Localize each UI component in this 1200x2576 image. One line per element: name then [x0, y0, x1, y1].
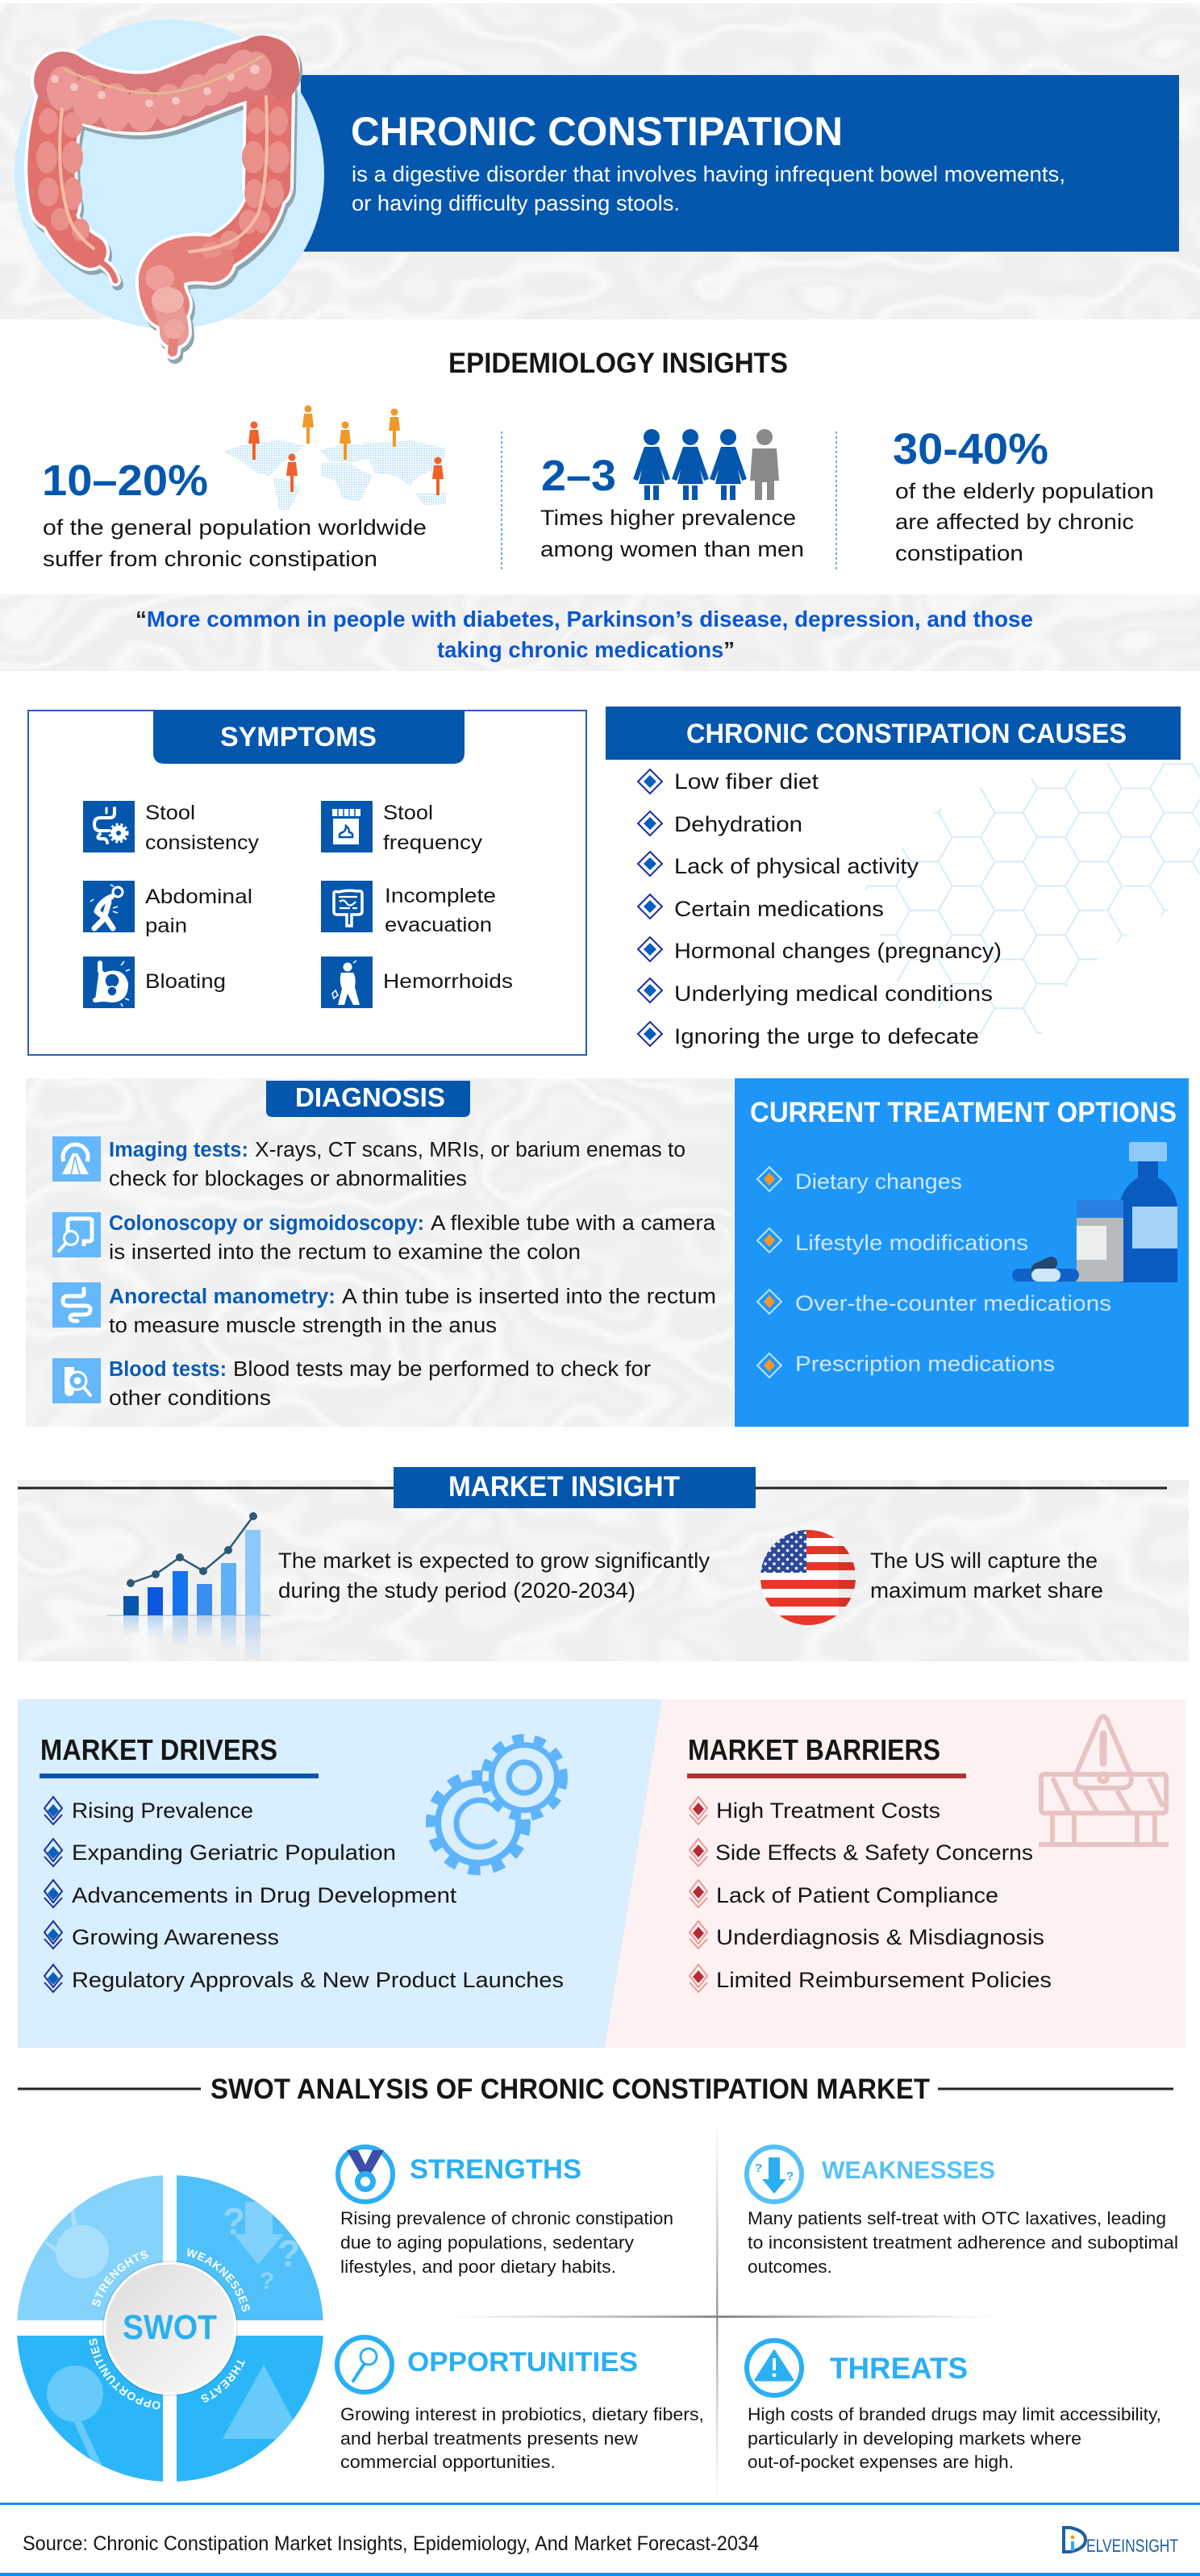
- market growth text: during the study period (2020-2034): [278, 1578, 635, 1603]
- diagnosis: anorectal manometry: Anorectal manometry:: [109, 1286, 335, 1308]
- panel: market drivers: [18, 1699, 662, 2048]
- symptom: abdominal pain: [83, 881, 252, 937]
- stat: 30-40%: constipation: [895, 541, 1023, 565]
- callout: quote strip: “More common in people with diabetes, Parkinson’s disease, depression, and those: [135, 606, 1033, 631]
- hexagon pattern: [865, 763, 1200, 1034]
- icon: warning barrier: [1039, 1716, 1169, 1844]
- diagnosis: colonoscopy: [52, 1212, 716, 1264]
- symptom: incomplete evacuation: evacuation: [385, 914, 492, 936]
- cause list: Certain medications: [674, 897, 884, 921]
- cause list: Low fiber diet: [674, 769, 819, 794]
- diagnosis: imaging tests: check for blockages or abnormalities: [109, 1168, 467, 1190]
- curved labels: STRENGHTS: [92, 2250, 148, 2307]
- cause list: Dehydration: [674, 812, 802, 836]
- cause list: Lack of physical activity: [674, 854, 919, 878]
- title: CHRONIC CONSTIPATION: [351, 109, 843, 154]
- barriers list: [690, 1797, 1052, 1992]
- cause list: [638, 769, 1002, 1048]
- header circle: [15, 19, 324, 329]
- diagnosis: anorectal manometry: [52, 1282, 716, 1337]
- footer: [0, 2503, 1200, 2576]
- threats block: THREATS: [830, 2352, 968, 2385]
- symptom: incomplete evacuation: [321, 881, 496, 936]
- icon: medal: [338, 2147, 393, 2202]
- causes heading: [606, 707, 1181, 760]
- symptom: bloating: [83, 957, 226, 1008]
- pale swot marks: [224, 2208, 298, 2289]
- diagnosis: blood tests: Blood tests may be performed to check for: [233, 1358, 652, 1381]
- symptom: abdominal pain: Abdominal: [145, 886, 252, 908]
- barriers list: Lack of Patient Compliance: [716, 1883, 998, 1907]
- icon: down arrow with question marks: ?: [755, 2161, 762, 2175]
- market growth text: [278, 1549, 710, 1603]
- symptom: stool consistency: consistency: [145, 832, 260, 854]
- diagnosis: blood tests: [52, 1358, 652, 1410]
- threats block: [747, 2340, 1161, 2472]
- icon: magnifier: [337, 2337, 392, 2392]
- title band: [301, 75, 1179, 252]
- stat: 10-20%: [42, 456, 427, 571]
- symptom: hemorrhoids: [321, 957, 513, 1008]
- definition text: is a digestive disorder that involves having infrequent bowel movements,: [352, 162, 1065, 186]
- stat: 2-3: [540, 429, 804, 561]
- chart: SWOT wheel: SWOT: [123, 2308, 217, 2347]
- pale swot marks: ?: [277, 2232, 300, 2274]
- symptom: incomplete evacuation: Incomplete: [385, 885, 496, 907]
- opportunities block: OPPORTUNITIES: [407, 2347, 638, 2378]
- causes heading: CHRONIC CONSTIPATION CAUSES: [686, 719, 1127, 749]
- diagnosis heading tab: DIAGNOSIS: [295, 1082, 445, 1112]
- treatment list: Prescription medications: [795, 1352, 1055, 1376]
- dividers: [444, 2117, 1002, 2503]
- curved labels: [89, 2249, 250, 2410]
- diagnosis: imaging tests: X-rays, CT scans, MRIs, or barium enemas to: [255, 1139, 685, 1161]
- pale swot marks: ?: [223, 2200, 245, 2242]
- symptoms heading tab: [153, 711, 465, 764]
- opportunities block: Growing interest in probiotics, dietary fibers,: [340, 2404, 704, 2424]
- treatment list: Lifestyle modifications: [795, 1231, 1028, 1255]
- stat: 2-3: 2–3: [541, 452, 616, 500]
- strengths block: lifestyles, and poor dietary habits.: [340, 2257, 616, 2277]
- panel: market barriers: [565, 1699, 1185, 2048]
- stat: 30-40%: are affected by chronic: [895, 510, 1134, 534]
- stat: 2-3: Times higher prevalence: [540, 506, 796, 530]
- diagnosis: anorectal manometry: A thin tube is inserted into the rectum: [342, 1286, 716, 1308]
- diagnosis heading tab: [266, 1081, 470, 1117]
- treatment heading: CURRENT TREATMENT OPTIONS: [750, 1097, 1177, 1128]
- market insight heading: MARKET INSIGHT: [448, 1471, 680, 1503]
- weaknesses block: to inconsistent treatment adherence and suboptimal: [748, 2232, 1178, 2253]
- icon: women and man: [633, 429, 779, 500]
- drivers list: [44, 1797, 564, 1992]
- drivers list: Rising Prevalence: [72, 1799, 253, 1823]
- callout: quote strip: [0, 594, 1200, 671]
- stat: 10-20%: suffer from chronic constipation: [43, 547, 377, 571]
- drivers list: Expanding Geriatric Population: [72, 1840, 396, 1865]
- US share text: The US will capture the: [870, 1549, 1098, 1573]
- barriers list: Underdiagnosis & Misdiagnosis: [716, 1925, 1044, 1949]
- barriers list: High Treatment Costs: [716, 1799, 940, 1823]
- divider: [501, 431, 502, 570]
- panel: market insight: [18, 1467, 1189, 1664]
- strengths block: due to aging populations, sedentary: [340, 2232, 635, 2253]
- barriers list: Limited Reimbursement Policies: [716, 1968, 1052, 1992]
- diagnosis: colonoscopy: A flexible tube with a camera: [431, 1212, 716, 1235]
- diagnosis: blood tests: other conditions: [109, 1387, 271, 1410]
- symptom: abdominal pain: pain: [145, 915, 187, 937]
- center circle: [102, 2261, 238, 2396]
- strengths block: [338, 2147, 673, 2277]
- chart: market growth bars: [107, 1512, 270, 1664]
- icon: warning triangle: [747, 2340, 802, 2395]
- SWOT heading: SWOT ANALYSIS OF CHRONIC CONSTIPATION MARKET: [210, 2074, 930, 2105]
- weaknesses block: outcomes.: [748, 2257, 832, 2277]
- symptom: stool frequency: [321, 801, 483, 854]
- weaknesses block: [747, 2147, 1178, 2277]
- drivers heading: MARKET DRIVERS: [40, 1733, 277, 1766]
- icon: medicine bottles: [1012, 1142, 1177, 1282]
- stat: 10-20%: 10–20%: [42, 456, 208, 505]
- opportunities block: and herbal treatments presents new: [340, 2428, 639, 2449]
- panel: causes: [606, 707, 1200, 1048]
- diagnosis: colonoscopy: Colonoscopy or sigmoidoscopy:: [109, 1212, 424, 1235]
- threats block: particularly in developing markets where: [748, 2428, 1081, 2449]
- diagnosis: anorectal manometry: to measure muscle strength in the anus: [109, 1315, 497, 1337]
- definition text: [352, 162, 1065, 215]
- drivers list: Regulatory Approvals & New Product Launches: [72, 1968, 564, 1992]
- threats block: High costs of branded drugs may limit accessibility,: [748, 2404, 1161, 2424]
- panel: SWOT analysis: [17, 2074, 1178, 2482]
- icon: US flag: [760, 1530, 856, 1625]
- drivers list: Growing Awareness: [72, 1925, 279, 1949]
- icon: colon illustration: [36, 35, 299, 356]
- opportunities block: [337, 2337, 704, 2472]
- treatment list: Over-the-counter medications: [795, 1291, 1111, 1315]
- stat: 10-20%: of the general population worldwide: [43, 515, 427, 540]
- panel: symptoms: [28, 711, 586, 1055]
- curved labels: THREATS: [201, 2360, 245, 2403]
- diagnosis: imaging tests: [52, 1136, 685, 1190]
- cause list: Hormonal changes (pregnancy): [674, 939, 1002, 963]
- US share text: [870, 1549, 1103, 1603]
- symptom: stool frequency: Stool: [383, 802, 433, 824]
- panel: epidemiology insights: [42, 348, 1154, 571]
- icon: world map with people: [223, 405, 446, 510]
- panel: treatment options: [735, 1078, 1189, 1427]
- icon: down arrow with question marks: [747, 2147, 802, 2202]
- stat: 30-40%: 30-40%: [893, 425, 1048, 473]
- symptom: hemorrhoids: Hemorrhoids: [383, 970, 513, 993]
- US share text: maximum market share: [870, 1578, 1103, 1603]
- symptom: stool consistency: [83, 801, 260, 854]
- curved labels: OPPORTUNITIES: [89, 2339, 160, 2410]
- callout: quote strip: taking chronic medications”: [437, 637, 735, 662]
- diagnosis: colonoscopy: is inserted into the rectum to examine the colon: [109, 1241, 581, 1264]
- drivers heading: [40, 1733, 319, 1778]
- drivers list: Advancements in Drug Development: [72, 1883, 457, 1907]
- strengths block: STRENGTHS: [410, 2154, 581, 2185]
- diagnosis: imaging tests: Imaging tests:: [109, 1139, 248, 1161]
- symptoms heading tab: SYMPTOMS: [220, 722, 377, 752]
- weaknesses block: WEAKNESSES: [822, 2156, 995, 2184]
- definition text: or having difficulty passing stools.: [352, 191, 680, 215]
- divider: [835, 431, 837, 570]
- barriers heading: MARKET BARRIERS: [688, 1733, 940, 1766]
- strengths block: Rising prevalence of chronic constipation: [340, 2208, 673, 2228]
- icon: down arrow with question marks: ?: [786, 2170, 794, 2183]
- opportunities block: commercial opportunities.: [340, 2452, 556, 2472]
- cause list: Underlying medical conditions: [674, 982, 993, 1006]
- chart: SWOT wheel: [17, 2175, 323, 2482]
- heading: EPIDEMIOLOGY INSIGHTS: [448, 348, 788, 379]
- treatment list: [757, 1167, 1111, 1378]
- cause list: Ignoring the urge to defecate: [674, 1024, 979, 1048]
- stat: 30-40%: of the elderly population: [895, 479, 1154, 503]
- barriers list: Side Effects & Safety Concerns: [715, 1840, 1033, 1865]
- market insight heading: [394, 1467, 756, 1508]
- icon: gears: [431, 1736, 566, 1870]
- logo: DelveInsight: ELVEINSIGHT: [1086, 2536, 1178, 2556]
- logo: DelveInsight: [1064, 2528, 1178, 2556]
- market growth text: The market is expected to grow significantly: [278, 1549, 710, 1573]
- symptom: stool consistency: Stool: [145, 802, 195, 824]
- pale swot marks: ?: [260, 2268, 274, 2295]
- treatment list: Dietary changes: [795, 1169, 962, 1194]
- panel: diagnosis: [26, 1078, 733, 1427]
- symptom: bloating: Bloating: [145, 970, 226, 993]
- stat: 30-40%: [893, 425, 1154, 565]
- diagnosis: blood tests: Blood tests:: [109, 1358, 227, 1381]
- source text: Source: Chronic Constipation Market Insights, Epidemiology, And Market Forecast-2034: [23, 2532, 759, 2555]
- threats block: out-of-pocket expenses are high.: [748, 2452, 1014, 2472]
- header panel: [0, 3, 1200, 356]
- symptom: stool frequency: frequency: [383, 832, 483, 854]
- weaknesses block: Many patients self-treat with OTC laxatives, leading: [748, 2208, 1166, 2228]
- curved labels: WEAKNESSES: [187, 2249, 250, 2311]
- stat: 2-3: among women than men: [540, 537, 804, 561]
